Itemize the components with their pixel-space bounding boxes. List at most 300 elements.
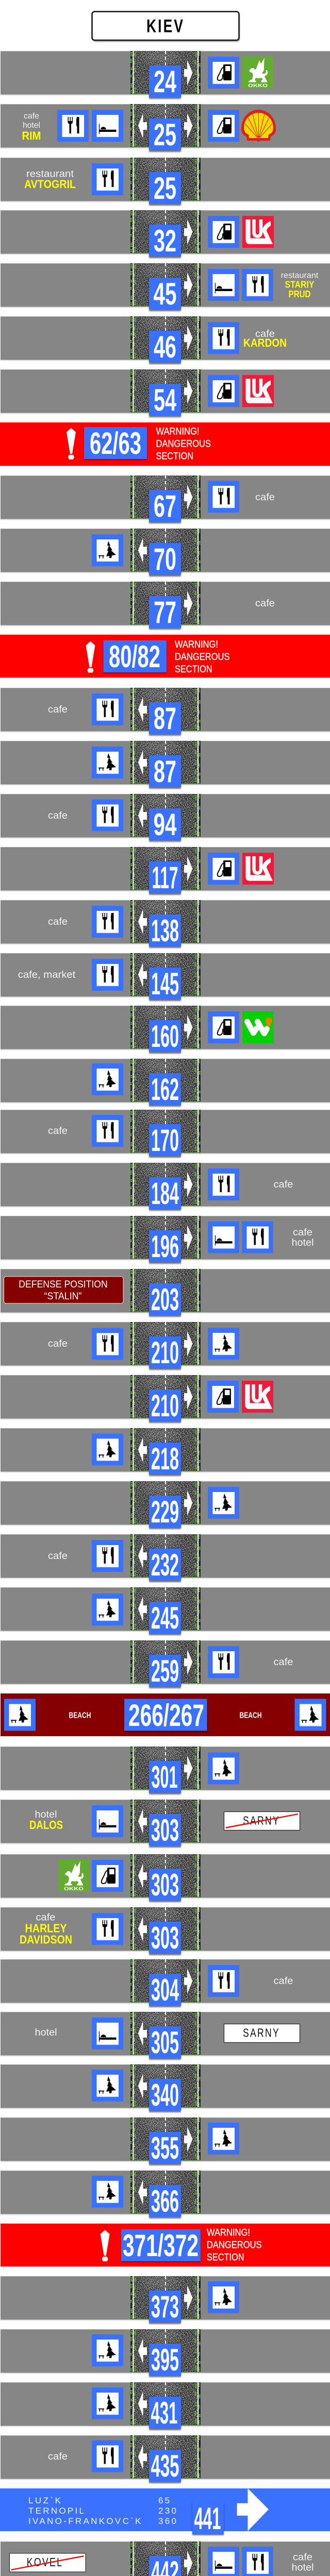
- icon: picnic tree: [92, 747, 123, 778]
- sign: SARNY: [224, 2024, 300, 2042]
- row: km 170: [1, 1110, 330, 1158]
- warning band: km 80/82: [0, 635, 330, 678]
- label: cafe: cafe: [48, 1126, 68, 1137]
- warning text: DANGEROUS: [175, 651, 230, 663]
- km badge 94: 94: [154, 807, 177, 842]
- destination list: LUZ`K: [28, 2496, 61, 2505]
- km badge 203: [149, 1282, 181, 1317]
- km badge 210: 210: [151, 1335, 179, 1370]
- label: cafe: cafe: [48, 810, 68, 821]
- distances: 230: [158, 2506, 176, 2516]
- logo: Lukoil: [242, 216, 274, 248]
- row: km 210 cafe: [1, 1322, 330, 1370]
- icon: fork and knife: [208, 1646, 239, 1678]
- icon: fuel: [207, 1381, 239, 1413]
- sign: SARNY crossed out: SARNY: [243, 1814, 280, 1827]
- km badge 301: [149, 1760, 181, 1794]
- callout: defense position Stalin: [4, 1277, 123, 1303]
- km badge 218: [149, 1442, 181, 1476]
- km badge 138: 138: [151, 913, 179, 948]
- road strip: [130, 1800, 201, 1842]
- icon: fork and knife: [242, 2547, 273, 2576]
- warning text: WARNING!: [207, 2227, 250, 2238]
- km badge 305: 305: [151, 2025, 179, 2060]
- road strip: [130, 1747, 201, 1790]
- km badge 170: [149, 1123, 181, 1158]
- warning text: SECTION: [156, 450, 193, 462]
- arrow right: [184, 378, 193, 404]
- label: cafe KARDON: KARDON: [243, 336, 287, 349]
- row: km 24: [1, 51, 330, 99]
- icon: fuel: [208, 853, 239, 885]
- callout: defense position Stalin: “STALIN”: [44, 1291, 81, 1302]
- km badge 259: [149, 1654, 181, 1688]
- km badge 162: 162: [151, 1072, 179, 1107]
- km badge 301: 301: [152, 1760, 177, 1794]
- label: cafe: cafe: [48, 917, 68, 927]
- road strip: [130, 2276, 201, 2319]
- icon: picnic tree: [208, 1753, 239, 1785]
- km badge 303: [149, 1813, 181, 1848]
- km badge 259: 259: [151, 1654, 179, 1688]
- icon: picnic tree: [208, 1328, 239, 1360]
- label: hotel DALOS: hotel: [35, 1809, 57, 1820]
- icon: fork and knife: [208, 322, 239, 354]
- icon: exclamation: [101, 2230, 110, 2261]
- km badge 366: 366: [151, 2184, 179, 2218]
- km badge 67: [149, 489, 181, 523]
- road strip: [130, 369, 201, 412]
- road strip: [130, 1110, 201, 1153]
- icon: fork and knife: [208, 1168, 239, 1200]
- road strip: [130, 953, 201, 996]
- icon: picnic tree: [92, 2070, 123, 2102]
- row: km 196: [1, 1216, 330, 1264]
- icon: fork and knife: [92, 1540, 123, 1572]
- icon: picnic tree: [208, 2281, 239, 2313]
- road strip: [130, 2435, 201, 2478]
- warning text: WARNING!: [156, 426, 199, 437]
- sign: KOVEL crossed out: [9, 2553, 86, 2572]
- km badge 395: [149, 2343, 181, 2377]
- label: cafe HARLEY DAVIDSON: [20, 1912, 72, 1946]
- row: km 373: [1, 2276, 330, 2324]
- icon: picnic tree: [92, 2387, 123, 2419]
- arrow left: [138, 697, 147, 722]
- road strip: [130, 847, 201, 890]
- label: cafe hotel: [292, 1227, 314, 1248]
- road strip: [130, 1322, 201, 1365]
- icon: bed: [92, 1805, 123, 1837]
- km badge 24: 24: [154, 64, 176, 99]
- km badge 435: [149, 2449, 181, 2483]
- label: cafe HARLEY DAVIDSON: cafe: [36, 1912, 56, 1923]
- arrow right: [184, 1649, 193, 1675]
- road strip: [130, 741, 201, 784]
- icon: fork and knife: [92, 1328, 123, 1360]
- label: restaurant STARIY PRUD: [281, 271, 319, 299]
- road strip: [130, 1534, 201, 1578]
- warning text: WARNING!: [175, 639, 218, 650]
- arrow right: [184, 272, 193, 298]
- label: cafe: cafe: [48, 1338, 68, 1349]
- road strip: [130, 158, 201, 201]
- km badge 54: 54: [154, 383, 176, 417]
- icon: fork and knife: [92, 2440, 123, 2472]
- km badge 355: [149, 2131, 181, 2165]
- road strip: [130, 1375, 201, 1418]
- warning text: SECTION: [175, 664, 212, 675]
- arrow left: [138, 2073, 147, 2099]
- label: cafe: cafe: [273, 1657, 293, 1668]
- km badge 435: 435: [151, 2449, 179, 2483]
- km badge 340: 340: [151, 2078, 179, 2112]
- icon: fuel: [208, 216, 239, 248]
- icon: fuel: [92, 1860, 123, 1892]
- km badge 210: [149, 1388, 181, 1423]
- arrow left: [138, 113, 147, 139]
- km badge 431: 431: [151, 2396, 177, 2430]
- icon: fork and knife: [92, 1913, 123, 1945]
- km badge 184: [149, 1176, 181, 1211]
- road strip: [130, 2012, 201, 2055]
- km badge 32: 32: [154, 224, 176, 258]
- destination list: IVANO-FRANKOVC`K: [28, 2516, 141, 2526]
- km badge 373: [149, 2290, 181, 2324]
- km badge 245: [149, 1601, 181, 1635]
- km badge 54: [149, 383, 181, 417]
- km badge 229: 229: [151, 1495, 179, 1529]
- km badge 117: [149, 860, 181, 895]
- arrow left: [138, 1916, 147, 1942]
- road strip: [130, 1006, 201, 1049]
- label: hotel: hotel: [35, 2027, 57, 2038]
- row: km 355: [1, 2117, 330, 2165]
- logo: Lukoil: [242, 375, 274, 407]
- arrow right: [184, 484, 193, 510]
- label: cafe hotel: cafe: [293, 1227, 312, 1238]
- label: restaurant AVTOGRIL: AVTOGRIL: [24, 178, 76, 191]
- road strip: [130, 1481, 201, 1524]
- km badge 77: 77: [154, 595, 176, 630]
- road strip: [130, 263, 201, 306]
- arrow right: [184, 1172, 193, 1197]
- row: km 304: [1, 1959, 330, 2007]
- label: cafe: cafe: [255, 598, 275, 609]
- road strip: [130, 1059, 201, 1101]
- km badge 442: [149, 2555, 181, 2576]
- sign: SARNY crossed out: [224, 1811, 300, 1830]
- icon: fuel: [208, 57, 239, 89]
- road strip: [130, 210, 201, 253]
- row: km 301: [1, 1747, 330, 1794]
- road strip: [130, 1959, 201, 2002]
- arrow left: [138, 2338, 147, 2364]
- km badge 196: 196: [151, 1229, 179, 1264]
- icon: fork and knife: [92, 1115, 123, 1147]
- row: km 70: [1, 529, 330, 577]
- label: cafe hotel: hotel: [292, 1238, 314, 1248]
- road strip: [130, 2064, 201, 2107]
- logo: Lukoil: [242, 853, 274, 885]
- km badge 371/372: 371/372: [123, 2228, 199, 2263]
- label: cafe KARDON: [243, 329, 287, 349]
- label: cafe HARLEY DAVIDSON: DAVIDSON: [20, 1933, 72, 1946]
- row: km 259: [1, 1640, 330, 1688]
- km badge 70: 70: [154, 542, 176, 577]
- icon: bed: [92, 110, 123, 142]
- km badge 355: 355: [151, 2131, 179, 2165]
- icon: fork and knife: [92, 693, 123, 725]
- label: restaurant STARIY PRUD: PRUD: [289, 289, 310, 299]
- km badge 138: [149, 913, 181, 948]
- km badge 196: [149, 1229, 181, 1264]
- logo: Shell: [241, 110, 276, 142]
- label: cafe: cafe: [273, 1976, 293, 1987]
- km badge 203: 203: [151, 1282, 179, 1317]
- icon: picnic tree right: [295, 1699, 326, 1731]
- arrow left: [138, 537, 147, 563]
- road strip: [130, 1907, 201, 1951]
- icon: bed: [92, 2018, 123, 2049]
- destination list: [28, 2496, 141, 2526]
- km badge 441: [192, 2501, 224, 2536]
- label: cafe KARDON: cafe: [255, 329, 275, 340]
- km badge 210: 210: [151, 1388, 179, 1423]
- row: km 160: [1, 1006, 330, 1054]
- row: km 305: [1, 2012, 330, 2060]
- arrow right: [184, 1014, 193, 1040]
- distances: [158, 2496, 176, 2526]
- km badge 145: 145: [151, 967, 179, 1001]
- arrow right: [184, 1968, 193, 1994]
- arrow left: [138, 1863, 147, 1889]
- icon: picnic tree left: [4, 1699, 36, 1731]
- arrow right: [184, 60, 193, 86]
- warning band: km 62/63: [0, 422, 330, 467]
- row: km 303 Harley Davidson: [1, 1907, 330, 1955]
- road strip: [130, 104, 201, 147]
- road strip: [130, 794, 201, 837]
- icon: picnic tree: [92, 1433, 123, 1465]
- row: km 67: [1, 476, 330, 523]
- km badge 87: [149, 754, 181, 789]
- km badge 62/63: [84, 426, 147, 461]
- arrow left: [138, 1808, 147, 1834]
- km badge 371/372: [121, 2228, 201, 2263]
- label: cafe: cafe: [48, 1551, 68, 1562]
- km badge 87: [149, 701, 181, 736]
- arrow right: [184, 2126, 193, 2152]
- arrow left: [138, 909, 147, 935]
- icon: fuel: [208, 375, 239, 407]
- km badge 87: 87: [154, 754, 176, 789]
- road strip: [130, 2329, 201, 2372]
- label: cafe hotel: hotel: [292, 2563, 314, 2573]
- road strip: [130, 2541, 201, 2576]
- km badge 232: [149, 1548, 181, 1582]
- arrow right: [184, 590, 193, 616]
- arrow right: [184, 113, 193, 139]
- arrow right: [184, 1331, 193, 1357]
- arrow left: [138, 2021, 147, 2046]
- row: km 77: [1, 582, 330, 630]
- label: cafe hotel RIM: hotel: [23, 121, 40, 130]
- km badge 24: [149, 64, 181, 99]
- arrow left: [138, 2179, 147, 2205]
- arrow right: [184, 2550, 193, 2576]
- km badge 77: [149, 595, 181, 630]
- km badge 184: 184: [151, 1176, 179, 1211]
- arrow left: [138, 750, 147, 775]
- arrow right: [184, 1755, 193, 1781]
- label: BEACH right: BEACH: [239, 1711, 262, 1720]
- km badge 25: [149, 171, 181, 206]
- callout: defense position Stalin: DEFENSE POSITION: [19, 1279, 108, 1290]
- km badge 25: [149, 117, 181, 152]
- arrow left: [138, 962, 147, 988]
- label: cafe hotel RIM: RIM: [22, 129, 41, 142]
- label: cafe: cafe: [48, 2451, 68, 2462]
- km badge 266/267: [124, 1698, 207, 1733]
- km badge 210: [149, 1335, 181, 1370]
- row: km 184: [1, 1163, 330, 1211]
- road strip: [130, 1269, 201, 1312]
- label: cafe hotel: cafe: [293, 2552, 312, 2563]
- row: km 25: [1, 104, 330, 152]
- arrow left: [138, 2444, 147, 2470]
- label: cafe: cafe: [273, 1179, 293, 1190]
- warning text: SECTION: [207, 2251, 244, 2263]
- road strip: [130, 1854, 201, 1897]
- icon: picnic tree: [208, 1487, 239, 1519]
- km badge 303: 303: [151, 1921, 179, 1955]
- km badge 160: 160: [151, 1019, 179, 1054]
- km badge 46: [149, 330, 181, 364]
- km badge 45: 45: [154, 277, 176, 311]
- warning text: DANGEROUS: [207, 2239, 262, 2250]
- direction band: km 441: [0, 2488, 330, 2536]
- row: km 340: [1, 2064, 330, 2112]
- icon: fork and knife: [92, 163, 123, 195]
- row: km 145: [1, 953, 330, 1001]
- icon: fork and knife: [57, 110, 89, 142]
- arrow right: [184, 325, 193, 351]
- km badge 80/82: 80/82: [109, 639, 160, 674]
- km badge 232: 232: [151, 1548, 179, 1582]
- label: cafe hotel RIM: cafe: [24, 112, 39, 121]
- icon: exclamation: [86, 641, 95, 673]
- km badge 395: 395: [151, 2343, 179, 2377]
- km badge 373: 373: [151, 2290, 179, 2324]
- road strip: [130, 476, 201, 518]
- warning text: [207, 2227, 262, 2263]
- km badge 170: 170: [151, 1123, 179, 1158]
- road strip: [130, 1163, 201, 1206]
- icon: bed: [208, 269, 239, 301]
- row: km 45: [1, 263, 330, 311]
- arrow right large: [237, 2488, 269, 2531]
- km badge 304: [149, 1973, 181, 2007]
- road strip: [130, 582, 201, 624]
- logo: Lukoil: [242, 1381, 273, 1413]
- label: hotel DALOS: [29, 1809, 63, 1832]
- km badge 117: 117: [152, 860, 178, 895]
- road strip: [130, 529, 201, 572]
- km badge 229: [149, 1495, 181, 1529]
- km badge 32: [149, 224, 181, 258]
- arrow right: [184, 219, 193, 245]
- road strip: [130, 2117, 201, 2161]
- km badge 67: 67: [154, 489, 176, 523]
- row: km 32: [1, 210, 330, 258]
- row: km 229: [1, 1481, 330, 1529]
- icon: fork and knife: [92, 800, 123, 832]
- label: cafe: cafe: [48, 704, 68, 715]
- row: km 435: [1, 2435, 330, 2483]
- km badge 304: 304: [151, 1973, 179, 2007]
- km badge 46: 46: [154, 330, 176, 364]
- arrow right: [184, 2285, 193, 2311]
- label: cafe hotel RIM: [22, 112, 41, 142]
- row: km 245: [1, 1587, 330, 1635]
- arrow left: [138, 1596, 147, 1622]
- km badge 431: [149, 2396, 181, 2430]
- km badge 160: [149, 1019, 181, 1054]
- icon: exclamation: [67, 428, 76, 460]
- sign: KOVEL crossed out: KOVEL: [27, 2555, 63, 2569]
- label: hotel DALOS: DALOS: [29, 1818, 63, 1832]
- row: km 54: [1, 369, 330, 417]
- arrow left: [138, 1543, 147, 1569]
- km badge 303: 303: [151, 1813, 179, 1848]
- row: km 395: [1, 2329, 330, 2377]
- icon: fork and knife: [242, 1221, 273, 1253]
- title sign: KIEV: [92, 11, 240, 42]
- row: km 87 cafe: [1, 688, 330, 736]
- beach band: km 266/267: [1, 1693, 330, 1736]
- km badge 441: 441: [194, 2501, 221, 2536]
- km badge 340: [149, 2078, 181, 2112]
- row: km 162: [1, 1059, 330, 1107]
- km badge 303: 303: [151, 1868, 179, 1902]
- icon: picnic tree: [92, 1063, 123, 1095]
- label: restaurant AVTOGRIL: restaurant: [26, 169, 74, 179]
- label: BEACH left: BEACH: [69, 1711, 91, 1720]
- road strip: [130, 51, 201, 94]
- icon: bed: [208, 1221, 239, 1253]
- logo: OKKO: [58, 1860, 89, 1892]
- icon: fork and knife: [92, 906, 123, 938]
- km badge 70: [149, 542, 181, 577]
- row: km 210 fuel: [1, 1375, 330, 1423]
- label: cafe: cafe: [255, 492, 275, 503]
- warning text: [175, 639, 230, 675]
- row: km 442 Kovel end: [1, 2541, 330, 2576]
- destination list: TERNOPIL: [28, 2506, 84, 2516]
- row: km 366: [1, 2171, 330, 2218]
- icon: fuel: [208, 1011, 239, 1043]
- icon: picnic tree: [92, 2334, 123, 2366]
- road strip: [130, 1428, 201, 1471]
- logo: WOG: [242, 1011, 273, 1043]
- icon: fork and knife: [92, 959, 123, 991]
- arrow right: [184, 1225, 193, 1250]
- icon: fuel: [208, 110, 239, 142]
- road strip: [130, 1640, 201, 1684]
- km badge 25: 25: [154, 171, 176, 206]
- km badge 87: 87: [154, 701, 176, 736]
